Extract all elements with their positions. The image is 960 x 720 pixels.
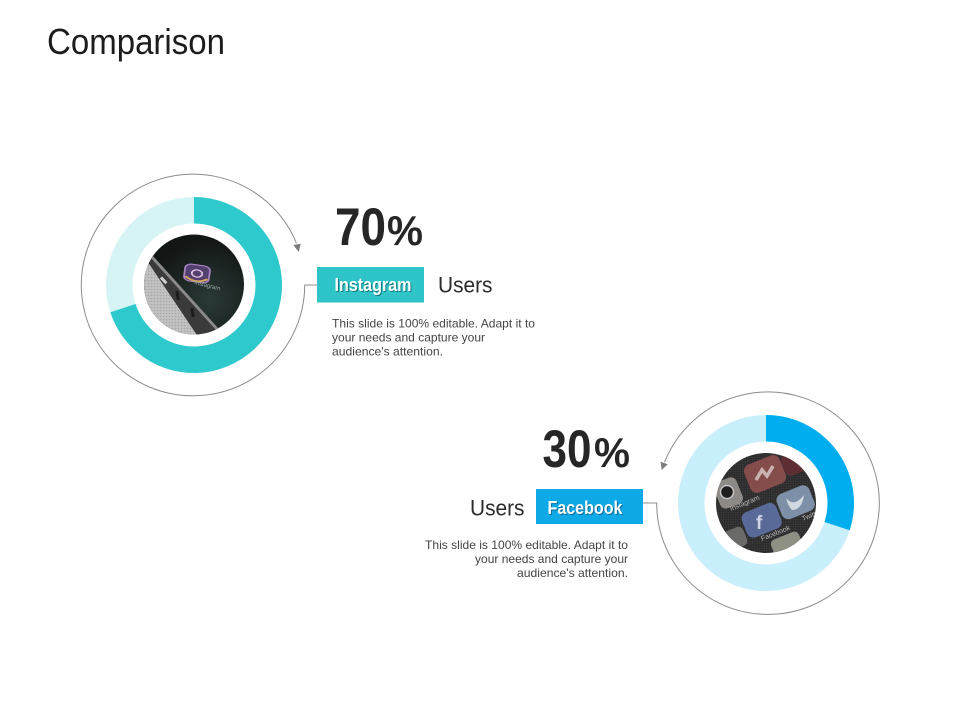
title: Comparison bbox=[47, 21, 225, 62]
donut chart: Instagram 70% bbox=[110, 197, 282, 373]
panel: Instagram bbox=[81, 174, 535, 396]
icon: Instagram logo bbox=[183, 263, 211, 284]
text block: Facebook description bbox=[425, 538, 628, 580]
stat: 70%: 70 bbox=[335, 198, 386, 257]
leader line and arrow ring bbox=[81, 174, 317, 396]
photo: phone app icons: Twitter bbox=[801, 508, 823, 523]
panel: Facebook bbox=[425, 392, 879, 614]
leader line and arrow ring bbox=[643, 392, 879, 614]
text block: Instagram description: your needs and capture your bbox=[332, 330, 485, 344]
text block: Facebook description: your needs and capture your bbox=[475, 552, 628, 566]
photo: phone showing Instagram icon: Instagram bbox=[194, 280, 221, 292]
stat: 30%: % bbox=[594, 429, 630, 476]
stat: 70%: % bbox=[387, 207, 423, 254]
photo: phone app icons bbox=[716, 453, 816, 553]
label: Facebook: Facebook bbox=[548, 499, 624, 519]
photo: phone app icons: Instagram bbox=[729, 495, 761, 513]
stat: 30%: 30 bbox=[542, 420, 592, 479]
text block: Facebook description: audience's attention. bbox=[517, 566, 628, 580]
label: Users: Users bbox=[438, 272, 492, 298]
icon: Twitter bbox=[776, 485, 815, 520]
label: Users: Users bbox=[470, 496, 524, 520]
icon: red app bbox=[744, 455, 786, 493]
infographic canvas bbox=[48, 28, 880, 615]
text block: Instagram description: audience's attention. bbox=[332, 344, 443, 358]
label: Instagram bbox=[317, 267, 424, 302]
photo: phone app icons: Facebook bbox=[760, 525, 792, 543]
icon: Instagram app bbox=[716, 477, 743, 509]
icon: Facebook: f bbox=[756, 513, 763, 534]
text block: Instagram description: This slide is 100% editable. Adapt it to bbox=[332, 316, 535, 330]
text block: Instagram description bbox=[332, 316, 535, 358]
donut chart: Facebook 30% bbox=[691, 415, 854, 578]
label: Instagram: Instagram bbox=[336, 276, 412, 296]
stat: 70% bbox=[335, 198, 423, 257]
label: Facebook bbox=[536, 489, 643, 524]
stat: 30% bbox=[542, 420, 630, 479]
text block: Facebook description: This slide is 100% editable. Adapt it to bbox=[425, 538, 628, 552]
photo: phone showing Instagram icon bbox=[144, 234, 244, 335]
label: Instagram: Instagram bbox=[334, 275, 412, 295]
label: Facebook: Facebook bbox=[548, 498, 623, 518]
